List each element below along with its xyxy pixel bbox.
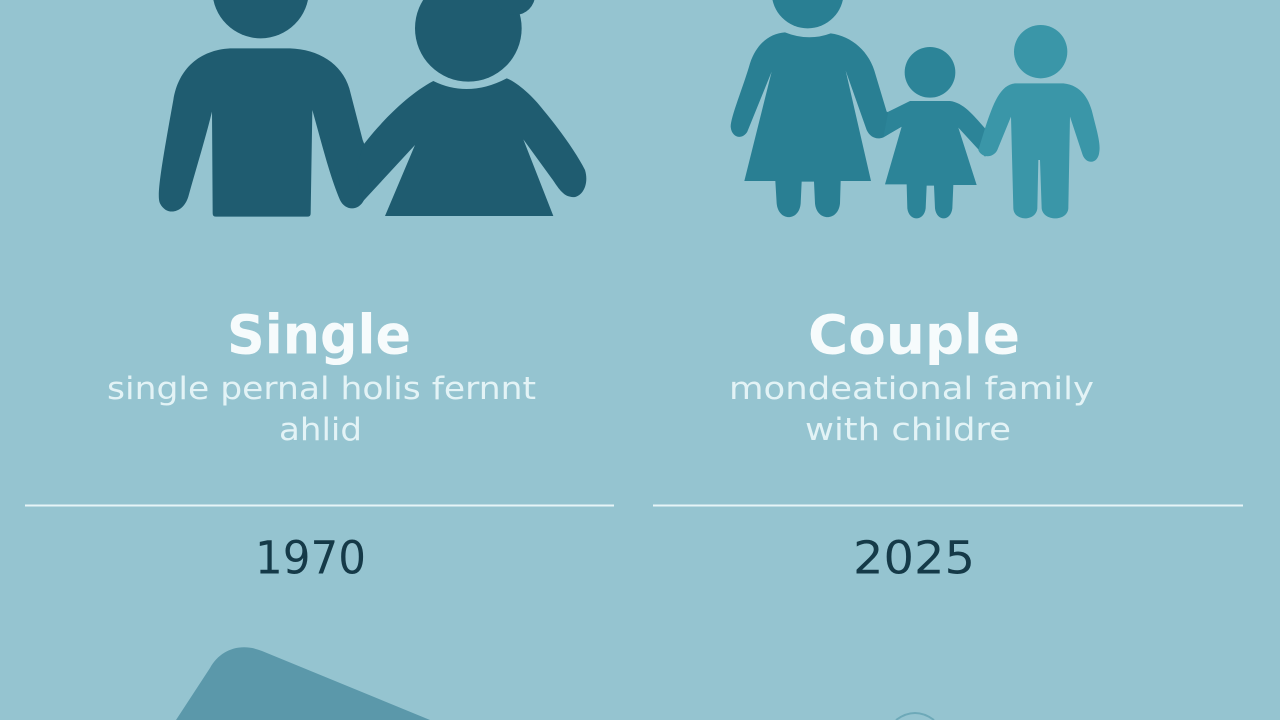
text block: couple description: with childre xyxy=(805,412,1011,448)
heading: Single: Single xyxy=(227,304,411,366)
text block: single description xyxy=(107,371,536,448)
figure: girl xyxy=(883,47,997,218)
panel: single 1970 xyxy=(25,0,614,720)
figure: mother xyxy=(731,0,903,217)
icon: family with children xyxy=(731,0,1100,218)
heading: Couple: Couple xyxy=(808,304,1020,366)
year: 2025: 2025 xyxy=(853,532,975,584)
text block: couple description xyxy=(729,371,1094,448)
text block: single description: single pernal holis fernnt xyxy=(107,371,536,407)
text block: couple description: mondeational family xyxy=(729,371,1094,407)
panel: couple 2025 xyxy=(653,0,1243,720)
icon: single parent and child xyxy=(159,0,586,217)
text block: single description: ahlid xyxy=(279,412,362,448)
partial shape: lower left xyxy=(176,647,430,720)
year: 1970: 1970 xyxy=(255,532,366,584)
figure: boy xyxy=(978,25,1100,218)
partial shape: lower right arc xyxy=(896,713,934,720)
